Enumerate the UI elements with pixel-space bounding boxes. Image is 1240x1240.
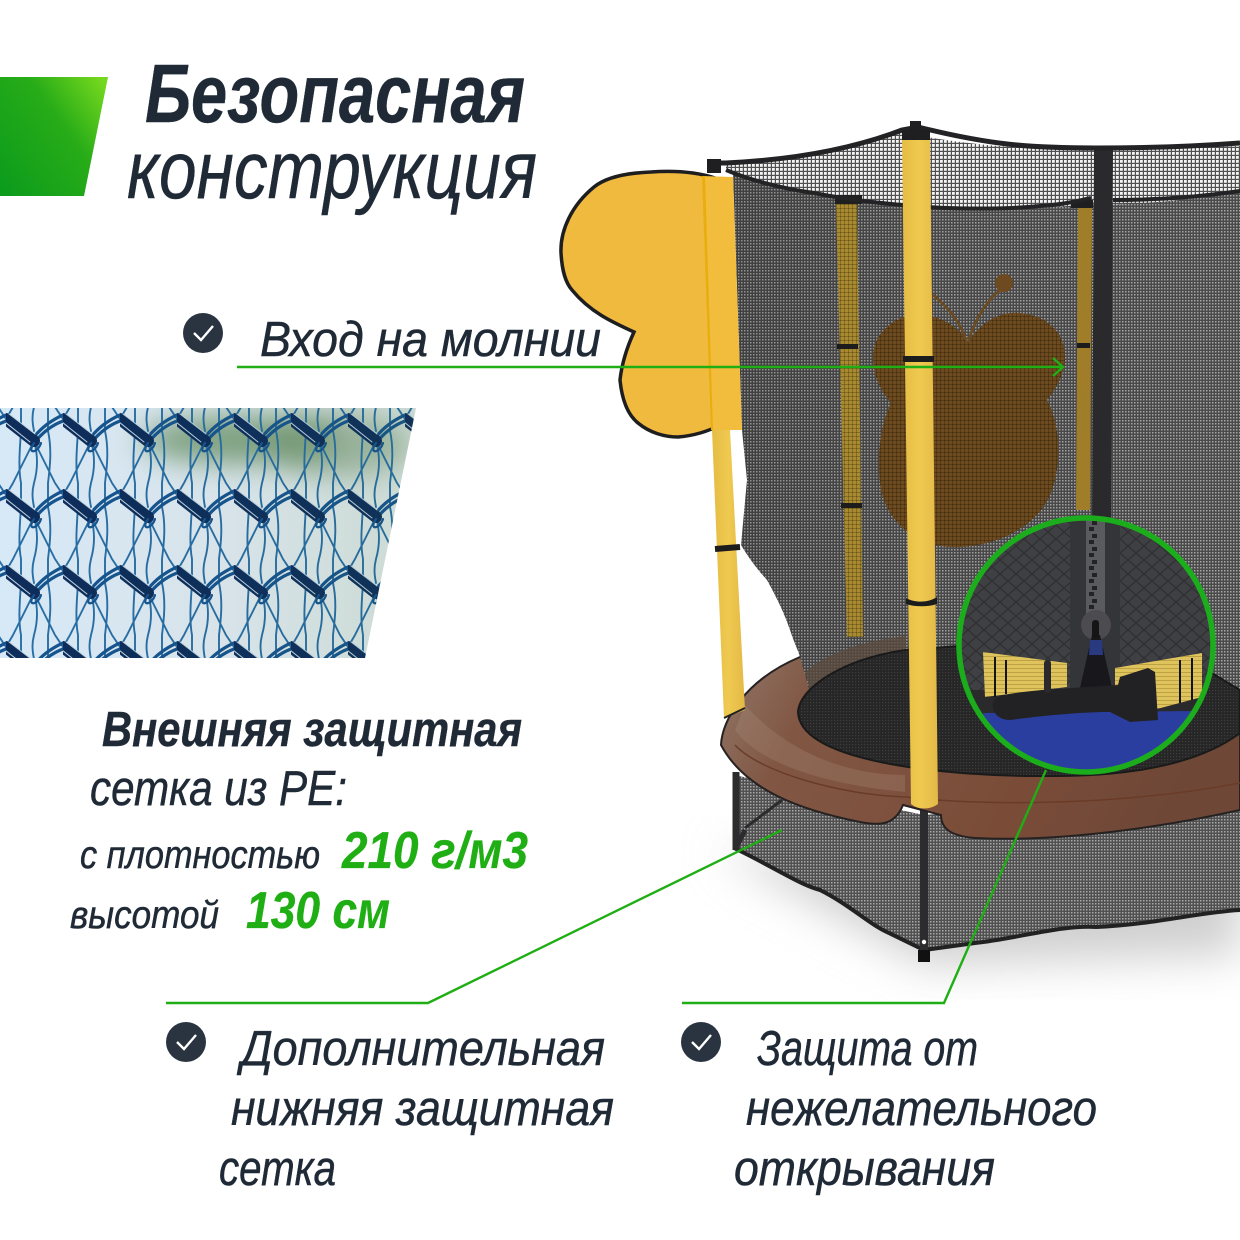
back pole left — [835, 195, 863, 637]
blue mat — [983, 711, 1192, 770]
label: lock protection — [734, 1022, 1097, 1196]
label: lower net — [219, 1022, 614, 1196]
lower safety net — [734, 775, 1240, 950]
label: zipper entrance: Вход на молнии — [260, 313, 601, 367]
zipper strip on net — [1092, 150, 1113, 530]
check icon: lower net — [166, 1022, 206, 1062]
label: lower net: нижняя защитная — [231, 1082, 614, 1136]
check icon: zipper entrance — [183, 313, 223, 353]
rim seam — [735, 745, 1240, 803]
green accent block — [0, 77, 108, 196]
zipper slider — [1080, 610, 1112, 688]
back wall net — [733, 173, 1240, 700]
jumping mat opening — [798, 643, 1240, 776]
rim highlight — [735, 705, 905, 792]
title — [127, 47, 537, 216]
zoom circle: zipper lock detail — [956, 515, 1216, 775]
back net left shading — [733, 173, 1240, 700]
leader line: lock protection — [682, 770, 1046, 1003]
zipper teeth — [1086, 517, 1105, 617]
net base over rim — [805, 636, 906, 695]
black lock handle — [993, 668, 1158, 722]
leader line: lower net — [166, 830, 782, 1003]
ground shadow — [720, 850, 1240, 965]
dark floor band — [970, 690, 1198, 714]
left pole sleeve — [702, 176, 745, 718]
yellow straps — [983, 652, 1067, 697]
check icon: lock protection — [681, 1022, 721, 1062]
brown padded rim — [721, 640, 1240, 839]
net specification text: 130 см — [246, 882, 390, 940]
leg struts — [735, 772, 926, 962]
label: lock protection: нежелательного — [746, 1082, 1097, 1136]
net specification text: Внешняя защитная — [102, 703, 522, 757]
net close-up photo — [0, 408, 420, 660]
label: lower net: Дополнительная — [236, 1022, 605, 1076]
butterfly wing entrance flap — [561, 171, 720, 437]
title: Безопасная — [145, 47, 525, 140]
zipper tape — [1070, 510, 1120, 690]
net specification text: с плотностью — [80, 834, 320, 877]
net lower edge rope — [726, 170, 1240, 209]
label: lock protection: открывания — [734, 1142, 995, 1196]
label: lower net: сетка — [219, 1142, 336, 1196]
net specification text: высотой — [70, 894, 219, 937]
front pole — [902, 140, 938, 808]
label: lock protection: Защита от — [757, 1022, 978, 1076]
back pole right — [1071, 200, 1093, 510]
net specification text: сетка из PE: — [90, 762, 347, 816]
net background — [962, 522, 1210, 690]
black net posts cap — [707, 121, 930, 173]
net top rope — [712, 127, 1240, 163]
trampoline illustration — [561, 121, 1240, 965]
title: конструкция — [127, 125, 537, 216]
upper light net — [726, 132, 1240, 209]
lower net binding — [734, 848, 1240, 950]
butterfly emblem on net — [873, 274, 1065, 547]
net specification text — [70, 703, 528, 940]
leader line: zipper entrance — [237, 358, 1063, 376]
net specification text: 210 г/м3 — [341, 822, 528, 880]
